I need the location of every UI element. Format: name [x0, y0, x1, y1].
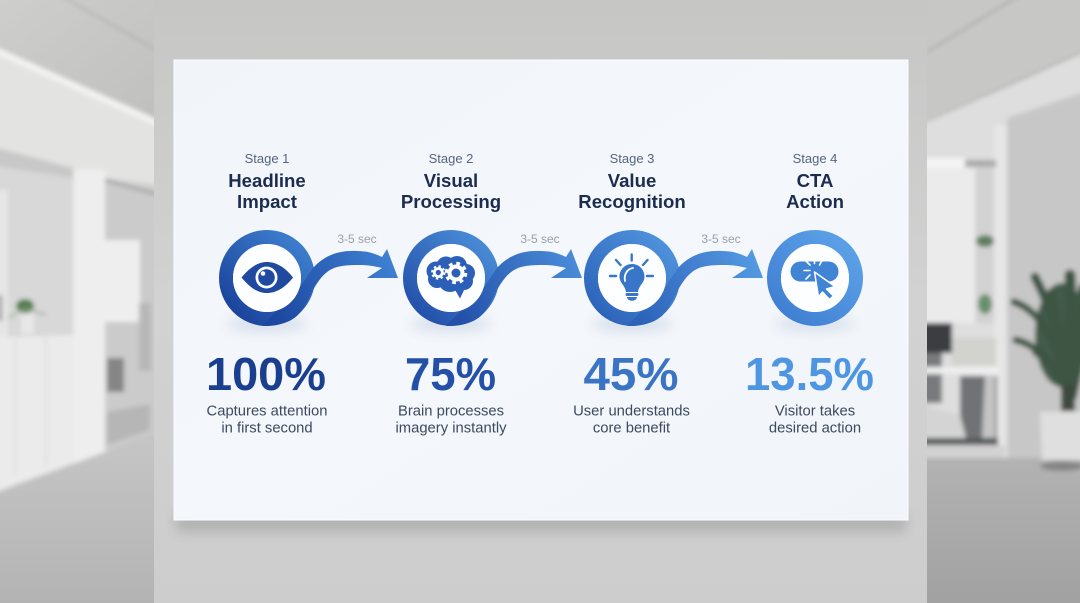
stage 3 description: core benefit: [593, 420, 670, 436]
stage 3 heading: Value: [608, 170, 656, 191]
stage 2 label: Stage 2: [429, 151, 473, 166]
stage 2 icon disc: [417, 244, 485, 312]
stage 1 ring: [226, 237, 308, 319]
stage 1 percentage: 100%: [206, 348, 326, 400]
panel shadow: [176, 512, 906, 532]
stage 2 heading: Processing: [401, 191, 501, 212]
icon: eye: [242, 262, 293, 293]
stage 3 percentage: 45%: [584, 348, 678, 400]
stage 3 ring shadow: [592, 316, 672, 332]
stage 4 icon disc: [781, 244, 849, 312]
stage 4 ring shadow: [775, 316, 855, 332]
timing label 3: 3-5 sec: [701, 232, 741, 246]
stage 3 label: Stage 3: [610, 151, 654, 166]
stage 1 heading: Impact: [237, 191, 297, 212]
stage 4 description: desired action: [769, 420, 861, 436]
stage 1 label: Stage 1: [245, 151, 289, 166]
arrow: stage 1 to 2: [262, 249, 398, 326]
stage 2 percentage: 75%: [405, 348, 496, 400]
stage 1 icon disc: [233, 244, 301, 312]
stage 2 description: Brain processes: [398, 404, 504, 420]
stage 3 icon disc: [598, 244, 666, 312]
stage 2: [395, 151, 582, 436]
stage 1 heading: Headline: [228, 170, 306, 191]
arrow: stage 2 to 3: [446, 249, 582, 326]
icon: light bulb: [610, 254, 653, 301]
arrow: stage 3 to 4: [627, 249, 763, 326]
stage 4 heading: Action: [786, 191, 844, 212]
stage 3 ring: [591, 237, 673, 319]
stage 1 description: in first second: [221, 420, 313, 436]
stage 4: [745, 151, 874, 436]
stage 1 ring shadow: [227, 316, 307, 332]
timing label 1: 3-5 sec: [337, 232, 377, 246]
stage 4 description: Visitor takes: [775, 404, 855, 420]
stage 3: [573, 151, 763, 436]
stage 2 heading: Visual: [424, 170, 478, 191]
stage 4 ring: [774, 237, 856, 319]
stage 1: [206, 151, 398, 436]
stage 2 ring shadow: [411, 316, 491, 332]
stage 4 label: Stage 4: [793, 151, 837, 166]
stage 2 description: imagery instantly: [395, 420, 507, 436]
stage 4 percentage: 13.5%: [745, 348, 874, 400]
stage 3 heading: Recognition: [578, 191, 686, 212]
icon: brain with gears: [426, 256, 475, 298]
panel: infographic board: [174, 60, 908, 520]
stage 2 ring: [410, 237, 492, 319]
stage 4 heading: CTA: [797, 170, 833, 191]
timing label 2: 3-5 sec: [520, 232, 560, 246]
icon: button with cursor: [790, 258, 838, 300]
stage 1 description: Captures attention: [207, 404, 327, 420]
stage 3 description: User understands: [573, 404, 690, 420]
